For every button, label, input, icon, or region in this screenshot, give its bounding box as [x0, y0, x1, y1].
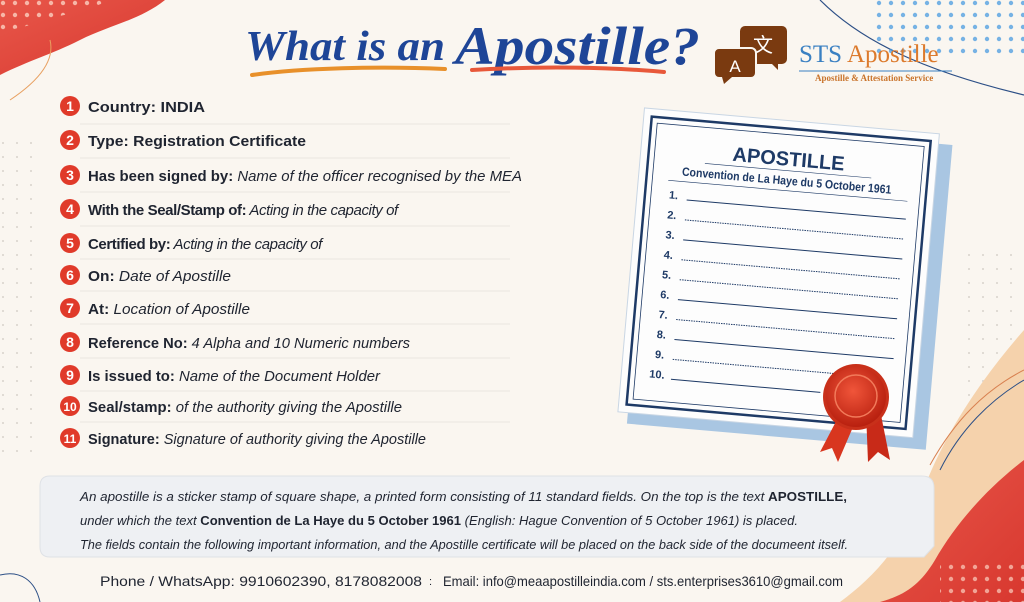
item 4: With the Seal/Stamp of: Acting in the capacity of	[88, 202, 400, 219]
contact footer	[100, 573, 843, 589]
apostille certificate illustration: APOSTILLE	[732, 144, 845, 176]
logo text: Apostille & Attestation Service	[815, 73, 933, 83]
contact footer: :	[429, 576, 432, 588]
item 1: 1	[66, 98, 74, 114]
item 6	[60, 265, 231, 285]
apostille certificate illustration: 6.	[660, 289, 670, 302]
apostille certificate illustration	[617, 108, 953, 450]
apostille certificate illustration: 9.	[654, 349, 665, 362]
apostille certificate illustration: 5.	[661, 269, 672, 282]
item 5: Certified by: Acting in the capacity of	[88, 236, 324, 253]
logo text: STS Apostille	[799, 41, 939, 68]
item 8: Reference No: 4 Alpha and 10 Numeric numbers	[88, 335, 410, 352]
logo text	[799, 41, 952, 83]
item 1	[60, 96, 205, 116]
item 3: 3	[66, 167, 74, 183]
apostille certificate illustration: 3.	[665, 229, 675, 242]
item 11: Signature: Signature of authority giving the Apostille	[88, 431, 426, 448]
item 1: Country: INDIA	[88, 99, 205, 116]
item 6: On: Date of Apostille	[88, 268, 231, 285]
description box	[40, 476, 934, 557]
item 6: 6	[66, 267, 74, 283]
item 2: Type: Registration Certificate	[88, 133, 306, 150]
apostille certificate illustration: 2.	[667, 209, 677, 222]
description box: under which the text Convention de La Haye du 5 October 1961 (English: Hague Convention of 5 October 1961) is placed.	[80, 513, 798, 528]
apostille certificate illustration: 8.	[656, 329, 666, 342]
apostille certificate illustration: 1.	[668, 189, 679, 202]
description box: An apostille is a sticker stamp of square shape, a printed form consisting of 11 standard fields. On the top is the text APOSTILLE,	[79, 489, 847, 504]
contact footer: Phone / WhatsApp: 9910602390, 8178082008	[100, 573, 422, 589]
item 5: 5	[66, 235, 74, 251]
item 10: 10	[63, 400, 77, 414]
list of fields	[60, 96, 522, 448]
logo icon: translate bubbles: 文	[753, 29, 773, 58]
contact footer: Email: info@meaapostilleindia.com / sts.enterprises3610@gmail.com	[443, 573, 843, 589]
item 2: 2	[66, 132, 74, 148]
item 11: 11	[64, 432, 77, 446]
title: What is an	[245, 24, 445, 70]
wax seal with ribbons	[820, 364, 890, 462]
item 3: Has been signed by: Name of the officer recognised by the MEA	[88, 168, 522, 185]
item 7: 7	[66, 300, 74, 316]
item 10: Seal/stamp: of the authority giving the Apostille	[88, 399, 402, 416]
apostille certificate illustration: 7.	[658, 309, 668, 322]
apostille certificate illustration: 4.	[663, 249, 673, 262]
apostille certificate illustration: Convention de La Haye du 5 October 1961	[681, 165, 892, 197]
item 8: 8	[66, 334, 74, 350]
logo icon: translate bubbles	[714, 26, 787, 84]
logo icon: translate bubbles: A	[729, 57, 741, 76]
item 7: At: Location of Apostille	[88, 301, 250, 318]
apostille certificate illustration: 10.	[649, 368, 665, 382]
title	[245, 16, 700, 76]
item 9: 9	[66, 367, 74, 383]
description box: The fields contain the following important information, and the Apostille certificate will be placed on the back side of the documeent itself.	[80, 537, 848, 552]
item 9: Is issued to: Name of the Document Holder	[88, 368, 381, 385]
title: Apostille?	[452, 16, 700, 76]
item 4: 4	[66, 201, 74, 217]
